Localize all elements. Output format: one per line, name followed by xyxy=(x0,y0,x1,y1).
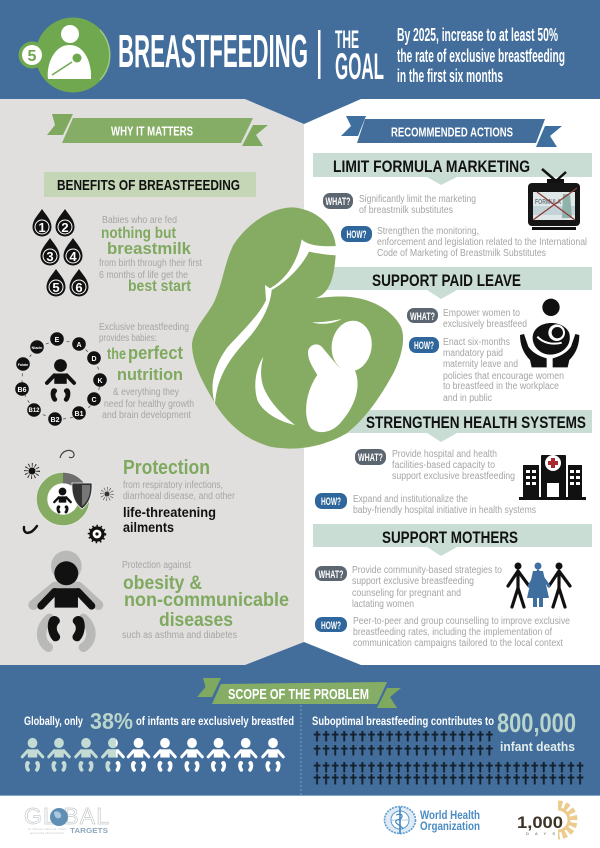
heading: benefits of breastfeeding: BENEFITS OF BREASTFEEDING xyxy=(57,177,240,194)
statistic: 38 percent: of infants are exclusively breastfed xyxy=(136,716,294,728)
logo: global targets: and young child nutrition xyxy=(30,832,65,835)
icon: baby ringed by vitamins: Folate xyxy=(18,363,28,367)
statistic: 800,000 infant deaths: 800,000 xyxy=(497,708,576,738)
icon: six milk drops: 5 xyxy=(52,280,60,295)
block: paid leave how: Enact six-months xyxy=(443,337,510,348)
block: health systems how: baby-friendly hospital initiative in health systems xyxy=(353,505,536,516)
text: obesity and non-communicable diseases: diseases xyxy=(159,610,233,631)
section bar: limit formula marketing xyxy=(313,153,592,185)
text: protection: life-threatening xyxy=(123,504,216,520)
block: support mothers how xyxy=(315,616,570,649)
goal statement xyxy=(397,25,565,86)
block: limit formula how: Code of Marketing of Breastmilk Substitutes xyxy=(377,248,546,259)
text: the perfect nutrition: the xyxy=(107,346,126,363)
logo: global targets: TARGETS xyxy=(70,826,108,835)
section bar: support paid leave xyxy=(320,267,592,299)
icon: baby ringed by vitamins xyxy=(15,332,107,426)
hair line highlight xyxy=(212,239,337,404)
icon: baby ringed by vitamins: K xyxy=(97,378,103,385)
pictogram: ten babies xyxy=(22,738,283,772)
block: paid leave how: maternity leave and xyxy=(443,359,518,370)
block: support mothers how: HOW? xyxy=(321,620,341,632)
baby xyxy=(306,344,358,432)
block: paid leave what: exclusively breastfeed xyxy=(443,319,527,330)
block: paid leave what: WHAT? xyxy=(410,311,435,323)
block: paid leave how: mandatory paid xyxy=(443,348,503,359)
block: limit formula how xyxy=(341,226,587,259)
text: nothing but breastmilk: 6 months of life get the xyxy=(99,270,188,281)
icon: baby ringed by vitamins: D xyxy=(91,356,97,363)
logo: global targets: To improve maternal, infant xyxy=(28,828,66,831)
icon: crossed out television xyxy=(528,169,580,230)
block: paid leave how: policies that encourage women xyxy=(443,371,564,382)
text: nothing but breastmilk: best start xyxy=(128,278,191,295)
icon: baby ringed by vitamins: B1 xyxy=(75,411,84,418)
logo: World Health Organization xyxy=(384,806,480,834)
icon: protection ring with germs xyxy=(24,450,112,542)
ribbon: why it matters: WHY IT MATTERS xyxy=(111,124,193,138)
text: protection xyxy=(123,457,236,535)
panel: header band: GOAL xyxy=(335,46,384,87)
logo: 1000 days xyxy=(517,805,573,836)
block: health systems how: Expand and institutionalize the xyxy=(353,494,468,505)
ribbon: scope of the problem: SCOPE OF THE PROBLEM xyxy=(228,686,369,703)
ribbon: why it matters xyxy=(47,114,268,146)
icon: baby ringed by vitamins: B6 xyxy=(18,387,27,394)
block: support mothers what: lactating women xyxy=(352,599,414,610)
text: obesity and non-communicable diseases: such as asthma and diabetes xyxy=(122,630,237,641)
goal statement: in the first six months xyxy=(397,66,503,86)
icon: hospital xyxy=(519,455,586,500)
block: limit formula what: Significantly limit the marketing xyxy=(359,194,476,205)
icon: goal 5 mother and baby badge xyxy=(18,18,110,92)
icon: six milk drops: 2 xyxy=(61,220,69,235)
section bar: strengthen health systems xyxy=(340,410,592,442)
block: support mothers how: Peer-to-peer and group counselling to improve exclusive xyxy=(353,616,570,627)
block: support mothers what: Provide community-based strategies to xyxy=(352,565,502,576)
logo: 1000 days: DAYS xyxy=(526,831,555,836)
icon: baby with obesity halo xyxy=(33,551,98,647)
central mother and baby illustration xyxy=(192,207,403,449)
icon: baby ringed by vitamins: A xyxy=(76,342,82,349)
panel: scope of the problem xyxy=(0,642,600,796)
text: protection: Protection xyxy=(123,457,210,479)
text: the perfect nutrition: & everything they xyxy=(113,387,179,398)
icon: six milk drops: 4 xyxy=(69,249,77,264)
block: health systems what xyxy=(355,449,515,482)
text: protection: diarrhoeal disease, and other xyxy=(123,491,236,502)
panel: header band: BREASTFEEDING xyxy=(118,25,308,77)
icon: goal 5 mother and baby badge: 5 xyxy=(28,48,37,65)
text: the perfect nutrition: nutrition xyxy=(117,365,183,384)
block: paid leave how: to breastfeed in the workplace xyxy=(443,381,559,392)
page background: left grey column xyxy=(0,90,304,670)
text: protection: ailments xyxy=(123,519,174,535)
section bar: support mothers: SUPPORT MOTHERS xyxy=(382,528,518,547)
icon: six milk drops: 1 xyxy=(38,220,46,235)
section bar: support paid leave: SUPPORT PAID LEAVE xyxy=(372,271,521,290)
text: the perfect nutrition: need for healthy growth xyxy=(104,399,194,410)
block: health systems what: Provide hospital and health xyxy=(392,449,497,460)
heading: the goal: THE xyxy=(335,26,359,54)
crescent xyxy=(255,357,295,425)
block: paid leave how: and in public xyxy=(443,393,492,404)
sleeve xyxy=(312,319,342,324)
statistic: 38 percent xyxy=(24,708,294,734)
block: limit formula how: Strengthen the monitoring, xyxy=(377,226,479,237)
ribbon: recommended actions: RECOMMENDED ACTIONS xyxy=(391,126,513,140)
text: nothing but breastmilk: from birth through their first xyxy=(99,258,202,269)
block: support mothers what: WHAT? xyxy=(318,569,344,581)
icon: baby ringed by vitamins: E xyxy=(55,337,60,344)
block: support mothers how: communication campaigns tailored to the local context xyxy=(353,638,563,649)
text: obesity and non-communicable diseases: obesity & xyxy=(123,573,202,594)
block: support mothers what xyxy=(315,565,502,610)
ribbon: scope of the problem xyxy=(197,678,401,708)
icon: baby ringed by vitamins: C xyxy=(91,397,97,404)
logo: 1000 days: 1,000 xyxy=(517,813,563,832)
text: obesity and non-communicable diseases xyxy=(122,560,289,641)
icon: baby ringed by vitamins: Niacin xyxy=(32,346,42,350)
block: paid leave what xyxy=(407,308,527,330)
statistic: 800,000 infant deaths xyxy=(312,708,576,754)
panel: header band xyxy=(0,0,600,124)
block: support mothers what: support exclusive breastfeeding xyxy=(352,576,474,587)
text: the perfect nutrition xyxy=(99,322,194,421)
block: limit formula how: HOW? xyxy=(346,229,367,241)
icon: crossed out television: FORMULA xyxy=(535,199,561,206)
ribbon: recommended actions xyxy=(341,116,562,147)
block: paid leave how xyxy=(409,337,564,404)
icon: baby ringed by vitamins: B2 xyxy=(51,417,60,424)
section bar: support mothers xyxy=(313,524,592,556)
block: health systems what: facilities-based capacity to xyxy=(392,460,495,471)
icon: six milk drops xyxy=(32,209,88,296)
block: support mothers what: counseling for pregnant and xyxy=(352,588,461,599)
icon: three people holding hands xyxy=(508,562,570,607)
block: limit formula what xyxy=(323,193,476,216)
block: paid leave what: Empower women to xyxy=(443,308,520,319)
block: limit formula what: of breastmilk substitutes xyxy=(359,205,453,216)
text: nothing but breastmilk xyxy=(99,215,202,295)
text: the perfect nutrition: provides babies: xyxy=(99,333,157,344)
text: the perfect nutrition: and brain development xyxy=(102,410,191,421)
block: health systems how: HOW? xyxy=(321,496,341,508)
block: health systems what: support exclusive breastfeeding xyxy=(392,471,515,482)
section bar: limit formula marketing: LIMIT FORMULA MARKETING xyxy=(333,158,530,176)
text: obesity and non-communicable diseases: non-communicable xyxy=(124,590,289,611)
text: nothing but breastmilk: nothing but xyxy=(101,225,176,242)
text: the perfect nutrition: perfect xyxy=(128,342,183,363)
block: health systems what: WHAT? xyxy=(358,452,383,464)
pictogram: rows of crosses xyxy=(312,731,585,784)
block: paid leave how: HOW? xyxy=(414,340,434,352)
statistic: 800,000 infant deaths: Suboptimal breastfeeding contributes to xyxy=(312,716,494,728)
statistic: 38 percent: Globally, only xyxy=(24,716,83,728)
icon: six milk drops: 3 xyxy=(46,249,54,264)
logo: World Health Organization: Organization xyxy=(420,821,480,833)
logo: global targets: GL BAL xyxy=(24,803,109,829)
block: support mothers how: breastfeeding rates, including the implementation of xyxy=(353,627,552,638)
text: nothing but breastmilk: Babies who are fed xyxy=(102,215,177,226)
heading: benefits of breastfeeding xyxy=(44,172,256,197)
block: health systems how xyxy=(315,493,536,516)
icon: six milk drops: 6 xyxy=(75,280,83,295)
text: nothing but breastmilk: breastmilk xyxy=(107,239,192,258)
text: obesity and non-communicable diseases: Protection against xyxy=(122,560,191,571)
text: protection: from respiratory infections, xyxy=(123,480,223,491)
icon: baby ringed by vitamins: B12 xyxy=(28,408,40,414)
text: the perfect nutrition: Exclusive breastfeeding xyxy=(99,322,189,333)
statistic: 38 percent: 38% xyxy=(90,708,133,734)
block: limit formula what: WHAT? xyxy=(326,196,351,208)
icon: mother and baby in hands xyxy=(520,299,579,367)
heading: the goal xyxy=(335,26,384,87)
statistic: 800,000 infant deaths: infant deaths xyxy=(500,739,575,754)
logo: World Health Organization: World Health xyxy=(420,810,480,822)
